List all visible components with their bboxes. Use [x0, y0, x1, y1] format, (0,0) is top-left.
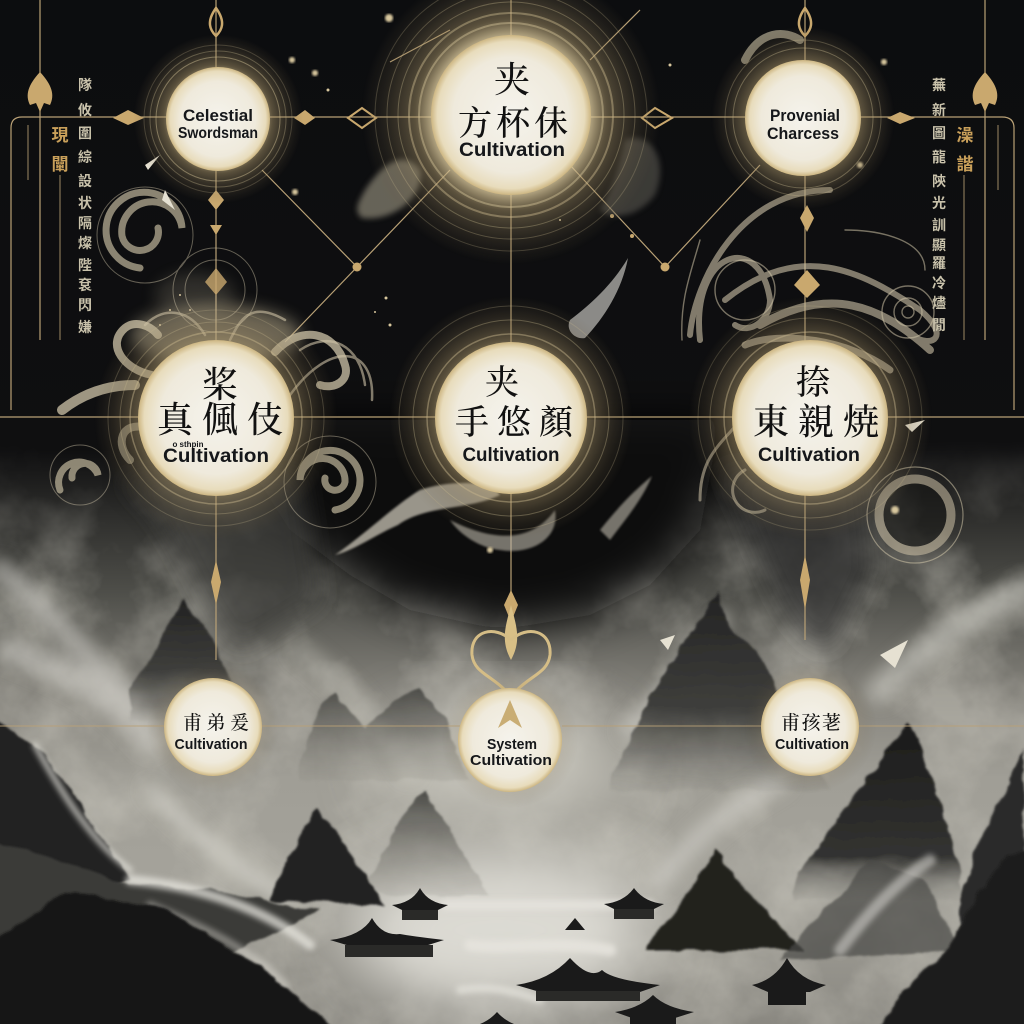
circle: middle centre Cultivation: 夹: [485, 364, 519, 402]
side text column right: 羅: [932, 255, 946, 271]
background: ink night sky fading into mist: [0, 451, 1024, 1024]
side text column right: 蕪: [932, 77, 946, 93]
circle: middle left Cultivation: Cultivation: [163, 446, 269, 467]
side text column left: [28, 77, 92, 340]
circle: middle centre Cultivation: 手悠顏: [455, 404, 574, 442]
circle: Celestial Swordsman: [133, 34, 303, 204]
foreground mountains: [0, 850, 1024, 1024]
side text column left: 隔: [78, 215, 92, 231]
far mountains: [0, 590, 1024, 930]
connector lines: [0, 0, 1024, 726]
mist figures around central circles: [335, 138, 660, 555]
side text column left: 嫌: [78, 319, 92, 335]
circle: middle left Cultivation: 真偑伎: [157, 400, 283, 440]
pagoda villages: [330, 888, 826, 1024]
circle: Provenial Charcess: Charcess: [767, 124, 839, 143]
circle: lower left Cultivation: 甫弟爰: [183, 711, 249, 734]
circle: Provenial Charcess: [711, 26, 895, 210]
side text column left: 設: [78, 173, 92, 189]
circle: middle centre Cultivation: Cultivation: [462, 445, 560, 466]
side text column left: 隊: [78, 77, 92, 93]
side text column right: 陝: [932, 173, 946, 189]
side text column left: 現: [52, 126, 68, 145]
side text column left: 闡: [52, 155, 68, 174]
side text column left: 綜: [78, 149, 92, 165]
side text column left: 燦: [78, 235, 92, 251]
circle: lower left Cultivation: Cultivation: [174, 736, 248, 753]
side text column right: 龍: [932, 149, 946, 165]
side text column left: 圍: [78, 125, 92, 141]
snow on ridges: [35, 745, 930, 1000]
side text column left: 攸: [78, 102, 92, 118]
side text column left: 陛: [78, 257, 92, 273]
side text column right: 新: [932, 102, 946, 118]
circle: middle left Cultivation: 桨: [202, 365, 238, 405]
swirl: right wisps: [682, 34, 963, 563]
side text column left: 状: [78, 195, 92, 211]
circle: lower left Cultivation: [147, 661, 279, 793]
side text column right: [932, 77, 998, 340]
circle: top centre Cultivation: Cultivation: [459, 140, 565, 161]
connector nodes: [352, 214, 670, 272]
circle: top centre Cultivation: 方杯佅: [458, 105, 568, 143]
side text column right: 閒: [932, 317, 946, 333]
circle: top centre Cultivation: [361, 0, 661, 265]
circle: middle right Cultivation: 捺: [796, 364, 831, 402]
side text column right: 澡: [956, 126, 974, 145]
circle: top centre Cultivation: 夹: [494, 60, 530, 100]
circle: middle left Cultivation: [94, 296, 338, 540]
circle: middle right Cultivation: [688, 296, 932, 540]
circle: lower centre System Cultivation: [442, 672, 578, 808]
side text column right: 圖: [932, 125, 946, 141]
circle: lower right Cultivation: [744, 661, 876, 793]
side text column right: 光: [932, 195, 946, 211]
side text column left: 袞: [78, 277, 92, 293]
mid mountains: [0, 790, 960, 960]
ornaments: [28, 8, 997, 690]
circle: middle right Cultivation: 東親焼: [753, 402, 879, 442]
circle: lower right Cultivation: Cultivation: [775, 736, 849, 753]
circle: lower centre System Cultivation: System: [487, 736, 537, 753]
circle: Celestial Swordsman: Celestial: [183, 106, 253, 125]
circle: lower right Cultivation: 甫孩荖: [781, 712, 841, 734]
mist patches and diagonal streaks: [0, 570, 1024, 900]
circle: lower centre System Cultivation: Cultivation: [470, 752, 552, 769]
circle: middle left Cultivation: o sthpin: [172, 440, 204, 449]
side text column right: 諧: [956, 154, 974, 174]
swirl: left spirals and ink curls: [50, 187, 376, 528]
side text column left: 閃: [78, 297, 92, 313]
circle: Celestial Swordsman: Swordsman: [178, 125, 258, 142]
circle: middle right Cultivation: Cultivation: [758, 445, 860, 466]
circle: middle centre Cultivation: [389, 296, 633, 540]
side text column right: 冷: [932, 275, 946, 291]
side text column right: 燼: [932, 295, 946, 311]
side text column right: 顯: [932, 237, 946, 253]
circle: Provenial Charcess: Provenial: [770, 106, 840, 125]
side text column right: 訓: [932, 217, 946, 233]
stars and gold dust: [145, 14, 925, 668]
